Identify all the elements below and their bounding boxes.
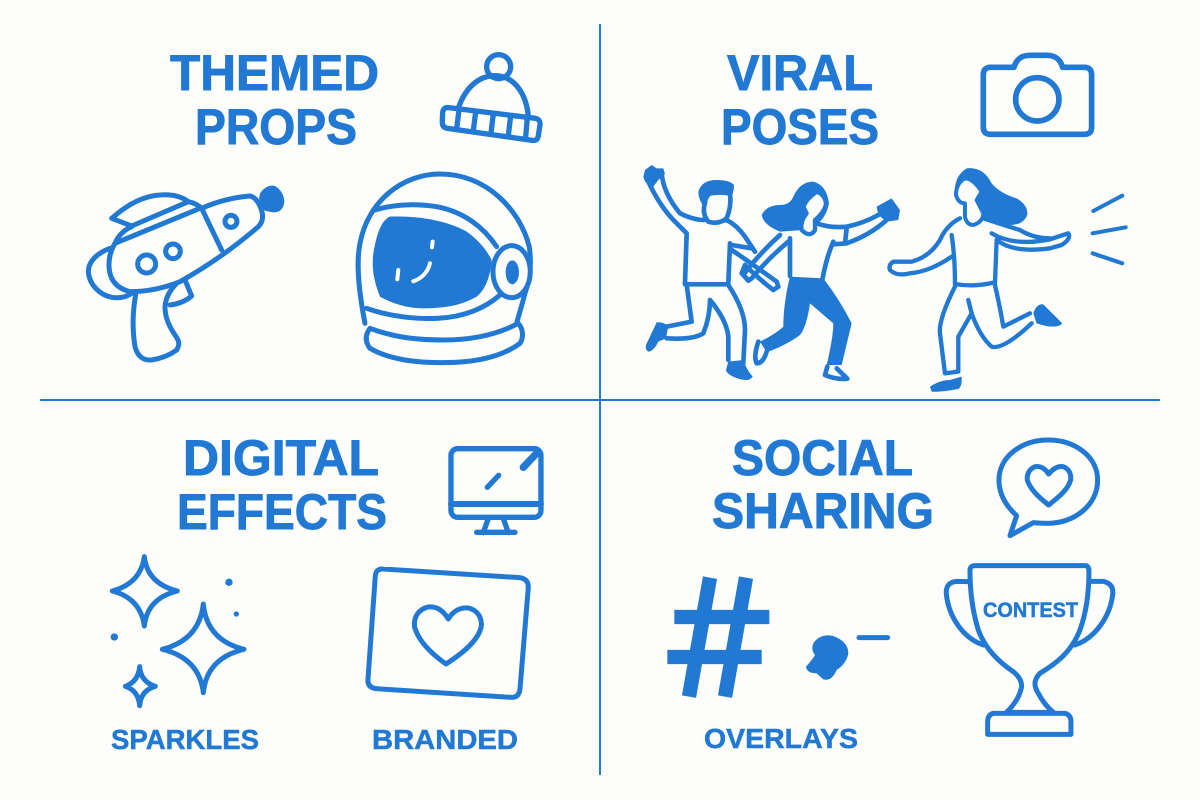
heading: digital effects [177,430,387,540]
heading: digital effects: DIGITAL [183,430,379,486]
icon: camera [983,55,1092,134]
icon: beanie hat [442,55,540,140]
icon: motion lines [1093,196,1126,263]
panel: viral poses [643,45,1126,392]
icon: branded photo frame with heart [368,569,528,697]
icon: ray gun [88,186,284,360]
panel: themed props [88,45,540,363]
illustration: woman dancing in dark trousers [743,182,900,379]
label: overlays: OVERLAYS [704,723,858,754]
heading: viral poses: POSES [721,99,879,155]
heading: digital effects: EFFECTS [177,484,387,540]
heading: viral poses: VIRAL [727,45,873,101]
panel: digital effects [111,430,541,755]
icon: astronaut helmet [358,174,530,363]
icon: overlay blob and dash [806,635,888,680]
icon: contest trophy [946,566,1113,734]
heading: viral poses [721,45,879,155]
illustration: woman running [890,168,1069,392]
heading: themed props [170,45,379,155]
label: contest: CONTEST [983,599,1078,622]
heading: themed props: THEMED [170,45,379,101]
panel: social sharing [667,430,1113,754]
icon: sparkles [111,557,244,706]
heading: social sharing: SOCIAL [732,430,913,486]
icon: hashtag [667,578,769,697]
label: sparkles: SPARKLES [111,724,259,755]
icon: monitor [451,449,541,533]
icon: speech bubble with heart [999,440,1098,536]
label: branded: BRANDED [372,724,518,755]
illustration: man dancing [643,165,778,380]
heading: social sharing: SHARING [712,483,934,539]
heading: themed props: PROPS [195,99,357,155]
heading: social sharing [712,430,934,539]
